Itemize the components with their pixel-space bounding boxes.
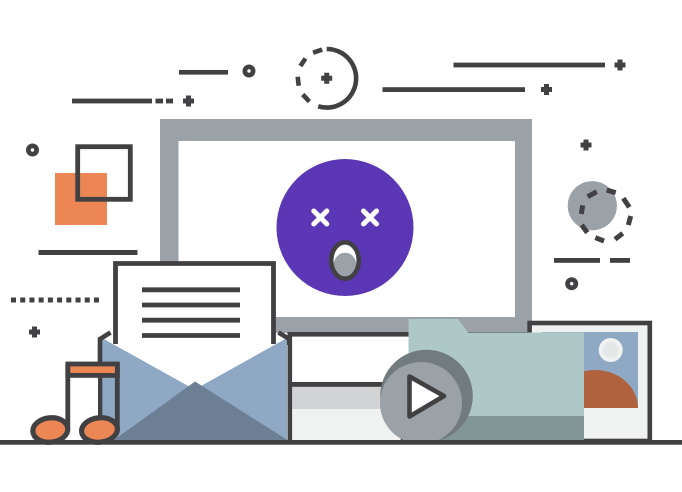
- decoration: left square and lines: [11, 146, 138, 338]
- face: purple shocked emoji: [276, 159, 414, 296]
- decoration: top-left lines and marks: [72, 67, 253, 106]
- icon: play triangle: [410, 376, 444, 416]
- envelope flaps: [102, 338, 190, 440]
- decoration: right circle and dashes: [554, 140, 631, 288]
- icon: open mouth: [331, 242, 359, 279]
- play button: [380, 350, 473, 444]
- monitor stand: [288, 332, 532, 440]
- icon: x eyes: [314, 211, 376, 224]
- envelope with letter: [100, 264, 289, 440]
- decoration: top-right lines and plus marks: [382, 60, 626, 95]
- photo frame: [530, 323, 650, 441]
- decoration: dashed circle with plus: [298, 49, 356, 108]
- photo: [542, 332, 638, 408]
- icon: music notes: [32, 364, 119, 444]
- letter: [116, 264, 274, 393]
- ground line: [0, 440, 682, 445]
- monitor frame: [160, 119, 532, 333]
- folder: [408, 319, 584, 440]
